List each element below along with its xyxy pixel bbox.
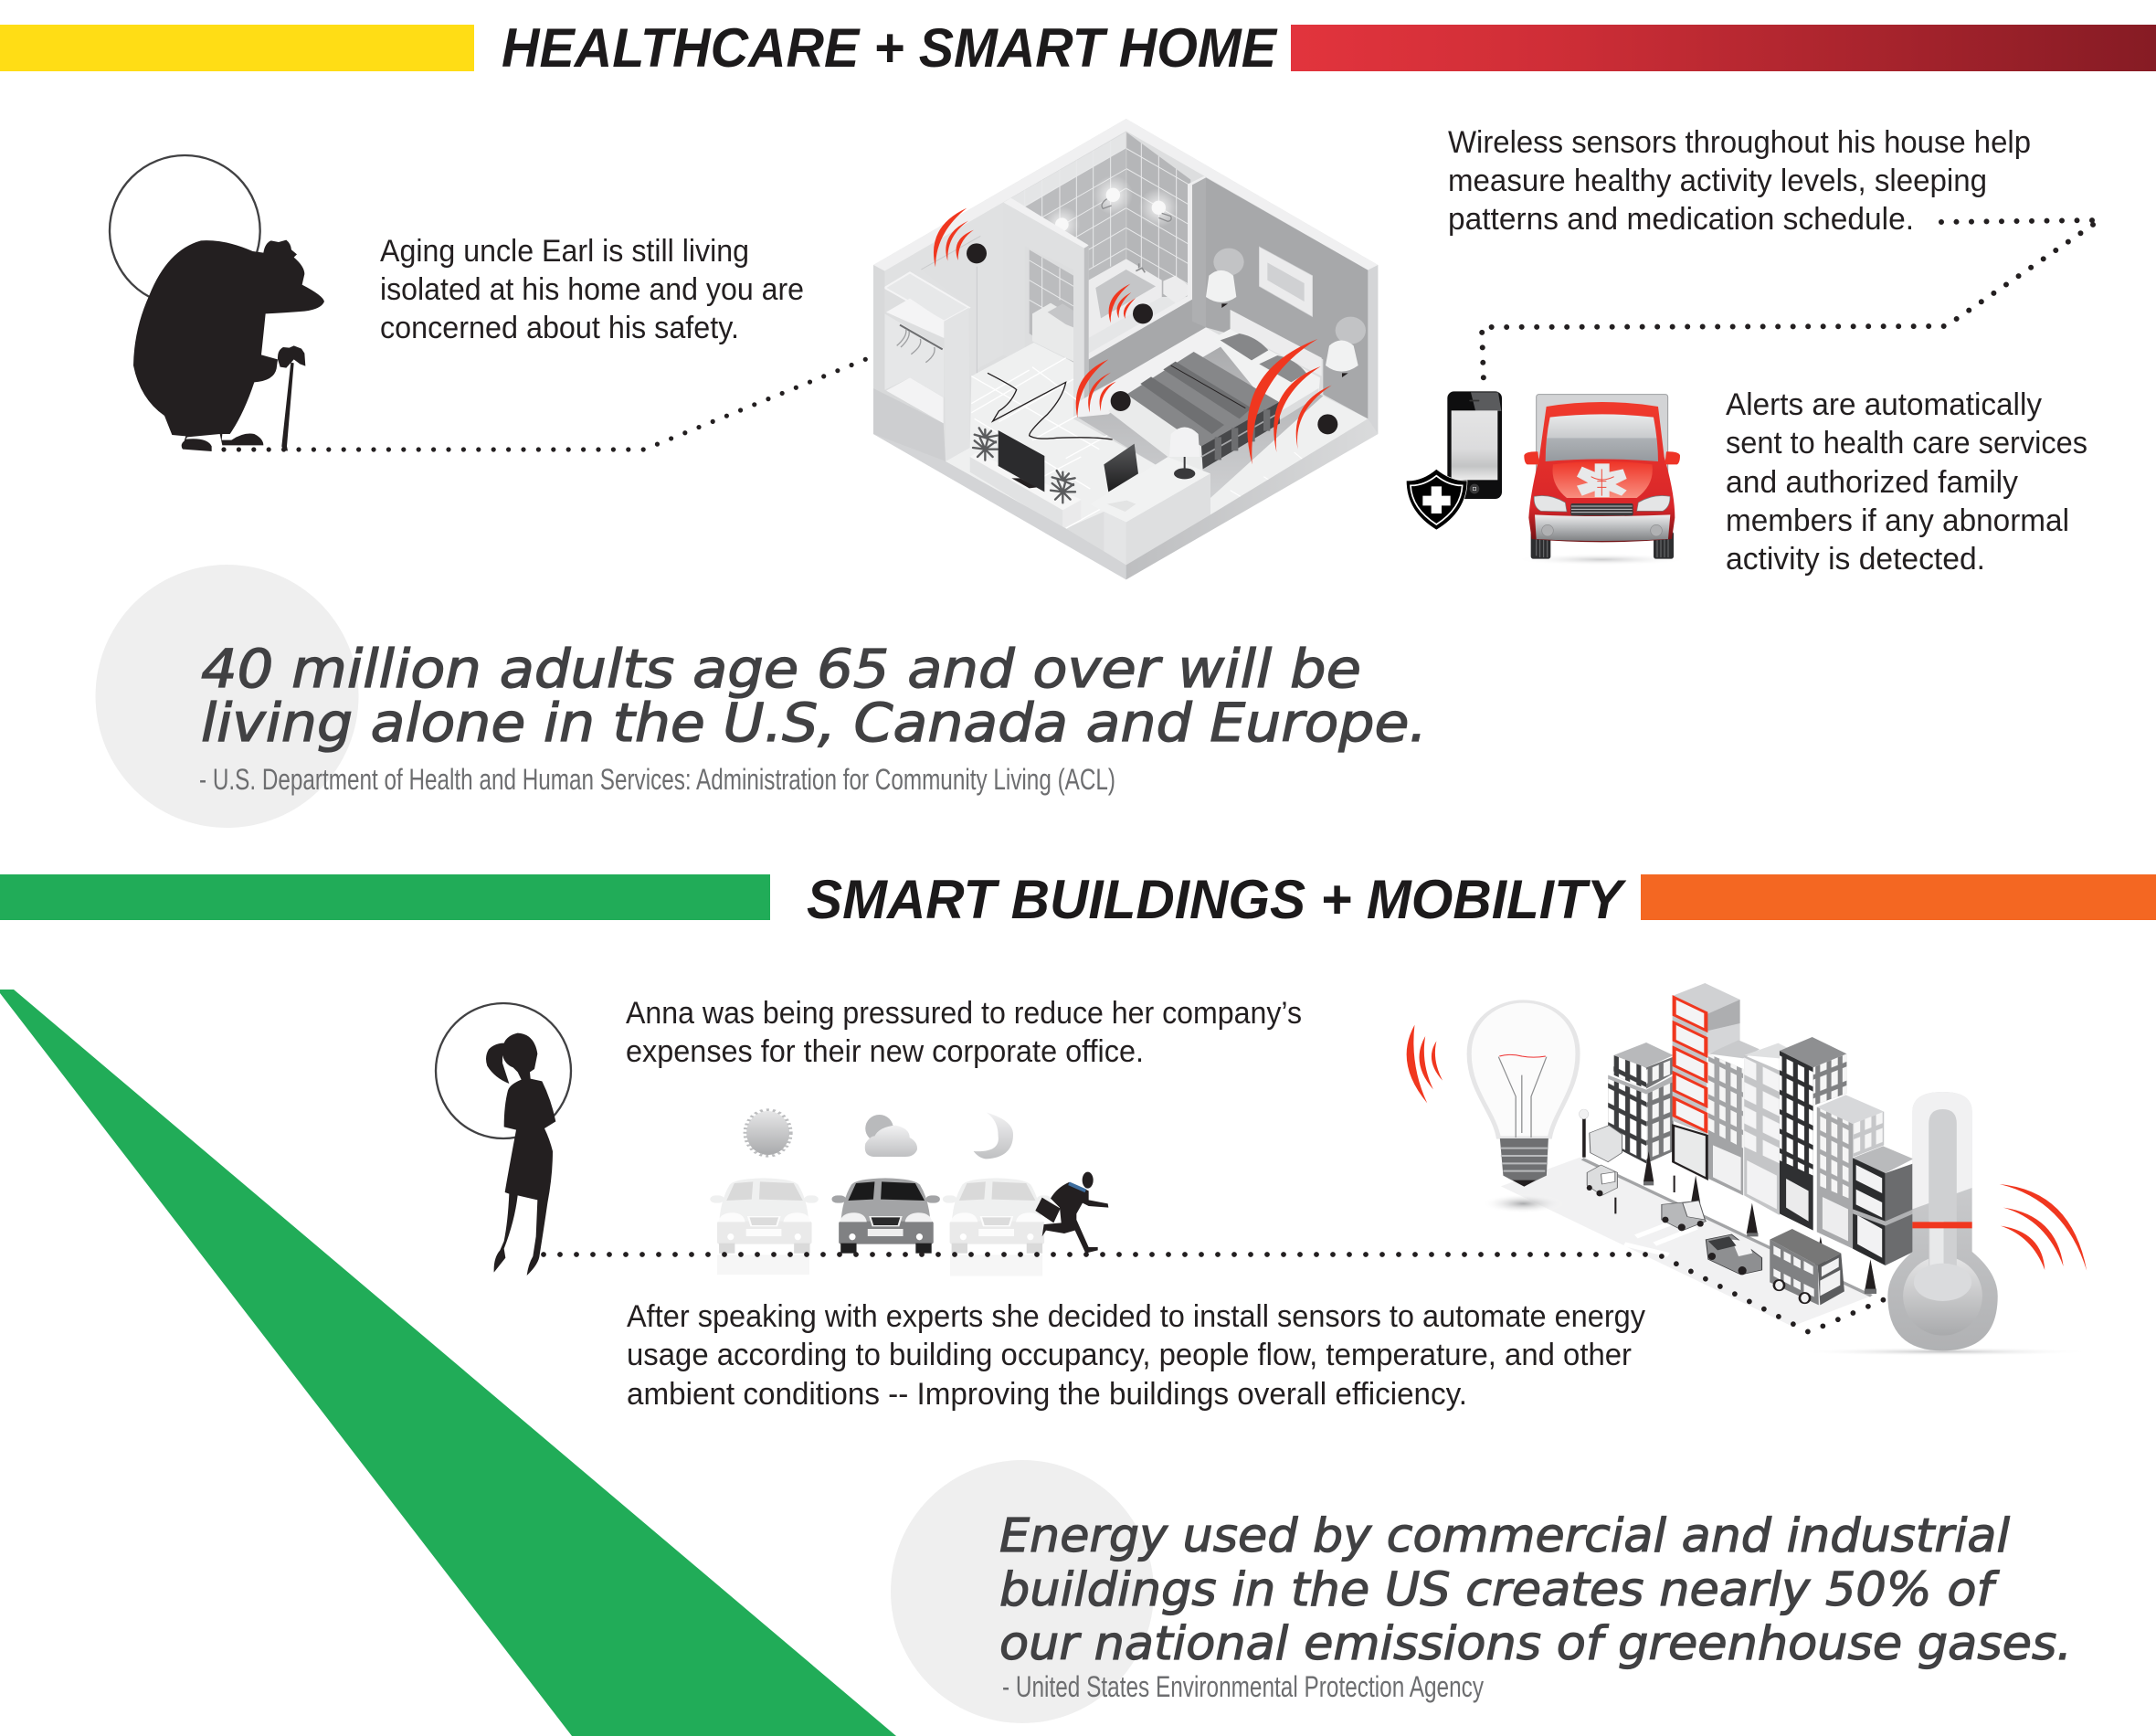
entry floor — [946, 343, 1156, 528]
alerts description text: Alerts are automatically — [1726, 387, 2042, 422]
car: daytime, active — [832, 1178, 940, 1254]
dotted connector: Anna to city block — [544, 1254, 1885, 1332]
dotted connector: sensors to phone — [1482, 220, 2099, 382]
car: morning, faded — [710, 1178, 819, 1254]
alerts description text: and authorized family — [1726, 465, 2018, 500]
isometric smart home cutaway — [873, 119, 1378, 579]
car: night, faded — [943, 1178, 1051, 1254]
phone, shield and ambulance icons — [1406, 391, 1688, 566]
statistic callout: 40 million adults: 40 million adults age 65 and over will be — [201, 638, 1361, 700]
statistic callout: 40 million adults: - U.S. Department of Health and Human Services: Administration for Community Living (ACL) — [199, 763, 1115, 796]
smart city cluster with bulb and thermometer — [1407, 983, 2092, 1356]
sensor 3 with red signal waves — [1076, 359, 1131, 418]
sensors decision text — [627, 1299, 1645, 1412]
bathroom tiled walls — [1024, 132, 1191, 297]
red window tower — [1673, 983, 1740, 1179]
left wall — [884, 203, 1003, 376]
squiggle path on the floor — [988, 373, 1113, 439]
TV cabinet, TV and plants — [970, 428, 1081, 528]
icon: smartphone — [1447, 391, 1502, 499]
Earl story text: concerned about his safety. — [380, 311, 739, 345]
faded car reflections — [717, 1254, 1042, 1276]
bathroom wall lights — [1043, 175, 1178, 243]
green diagonal wedge — [0, 990, 896, 1736]
section 1 header bars and title — [0, 17, 2156, 79]
icon: ambulance front view — [1515, 395, 1688, 566]
pickup on street — [1706, 1234, 1762, 1275]
section 2 header bars and title — [0, 869, 2156, 930]
sensor description text: Wireless sensors throughout his house help — [1448, 125, 2031, 160]
house lower faces — [873, 418, 1378, 579]
Earl story text — [380, 234, 804, 345]
street ground plane — [1501, 1158, 1871, 1327]
mid gray building — [1708, 1040, 1760, 1195]
alerts description text: members if any abnormal — [1726, 503, 2069, 538]
section 1 header bars and title: HEALTHCARE + SMART HOME — [502, 17, 1278, 79]
Anna story text: expenses for their new corporate office. — [626, 1034, 1144, 1069]
alerts description text: activity is detected. — [1726, 542, 1985, 577]
sensor 1 with red signal waves — [934, 208, 987, 267]
statistic callout: energy and emissions: buildings in the US creates nearly 50% of — [999, 1563, 2000, 1617]
isometric buildings — [1608, 983, 1913, 1265]
dotted connector: Earl to house — [224, 359, 866, 450]
icon: sun — [745, 1110, 791, 1156]
statistic callout: 40 million adults: living alone in the U.S, Canada and Europe. — [201, 692, 1427, 754]
Earl avatar: elderly man silhouette with cane — [110, 155, 324, 451]
statistic callout: energy and emissions: Energy used by commercial and industrial — [999, 1509, 2010, 1563]
Earl story text: Aging uncle Earl is still living — [380, 234, 749, 269]
red signal waves beside bulb — [1407, 1025, 1443, 1103]
red signal waves beside thermometer — [2000, 1184, 2087, 1271]
sensor 2 with red signal waves — [1109, 284, 1153, 323]
thermometer — [1793, 1092, 2092, 1356]
sensors decision text: After speaking with experts she decided to install sensors to automate energy — [627, 1299, 1645, 1334]
statistic callout: energy and emissions: our national emissions of greenhouse gases. — [999, 1617, 2072, 1671]
statistic callout: energy and emissions — [891, 1460, 2072, 1723]
front dark building — [1853, 1146, 1913, 1265]
Anna story text: Anna was being pressured to reduce her company’s — [626, 996, 1302, 1031]
light bulb — [1469, 1001, 1578, 1213]
tower block behind — [1707, 1000, 1740, 1053]
light horizontal-window building — [1744, 1043, 1792, 1215]
statistic callout: energy and emissions: - United States Environmental Protection Agency — [1002, 1670, 1484, 1703]
truck on street — [1662, 1201, 1706, 1231]
bedroom wall — [1089, 176, 1368, 418]
partition wall with doorway — [1003, 198, 1089, 418]
alerts description text: sent to health care services — [1726, 426, 2087, 460]
icon: medical shield — [1406, 469, 1467, 530]
sensors decision text: usage according to building occupancy, people flow, temperature, and other — [627, 1338, 1632, 1372]
bathtub and toilet — [1089, 259, 1188, 354]
dark corner building — [1608, 1043, 1674, 1163]
sensors decision text: ambient conditions -- Improving the buildings overall efficiency. — [627, 1377, 1467, 1412]
wall picture and sconce lamps — [1206, 247, 1366, 377]
alerts description text — [1726, 387, 2087, 577]
Anna avatar: woman silhouette — [436, 1003, 571, 1276]
closet with hangers — [873, 265, 970, 461]
desk, monitor and nightstand lamp — [1090, 427, 1210, 565]
double-decker bus — [1770, 1229, 1844, 1305]
street details: kiosk, lamps, trees — [1580, 1109, 1876, 1294]
statistic callout: 40 million adults — [95, 565, 1427, 828]
running businessman with briefcase — [1035, 1172, 1108, 1254]
icon: cloud with sun — [865, 1115, 917, 1157]
dark tall building — [1780, 1037, 1846, 1231]
bed with striped cover — [1108, 310, 1322, 472]
section 2 header bars and title: SMART BUILDINGS + MOBILITY — [807, 869, 1627, 930]
icon: crescent moon — [974, 1113, 1013, 1159]
Anna story text — [626, 996, 1302, 1069]
sensor 4 with red signal waves — [1247, 339, 1337, 464]
sensor description text: patterns and medication schedule. — [1448, 202, 1914, 237]
Earl story text: isolated at his home and you are — [380, 272, 804, 307]
day-night icons and cars — [710, 1110, 1051, 1276]
pale mid building — [1817, 1095, 1884, 1249]
van on street — [1587, 1165, 1617, 1196]
bedroom carpet and ledge — [1077, 327, 1368, 514]
sensor description text — [1448, 125, 2031, 237]
sensor description text: measure healthy activity levels, sleeping — [1448, 164, 1987, 198]
